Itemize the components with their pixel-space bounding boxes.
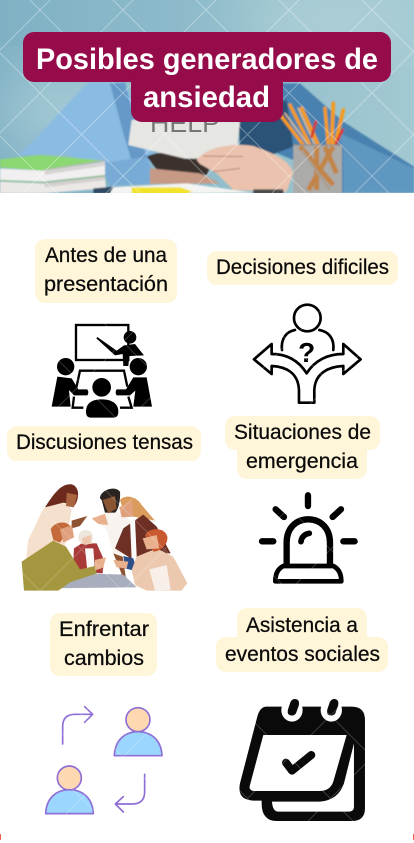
icon: alarm beacon — [262, 495, 355, 581]
label: Enfrentar cambios: cambios — [64, 647, 144, 670]
label: Decisiones dificiles: Decisiones dificiles — [216, 256, 389, 279]
label: Asistencia a eventos sociales: Asistencia a — [246, 614, 358, 637]
label: Situaciones de emergencia: emergencia — [246, 450, 358, 473]
label: Situaciones de emergencia — [225, 416, 380, 479]
icon: arguing group — [22, 484, 187, 591]
label: Asistencia a eventos sociales: eventos sociales — [225, 643, 380, 666]
icon: decision crossroads — [254, 305, 361, 403]
label: Antes de una presentación: presentación — [44, 273, 168, 296]
header photo: stressed student at desk — [0, 0, 414, 194]
watermark lattice over icons — [0, 193, 414, 843]
label: Antes de una presentación — [35, 239, 177, 303]
title — [23, 32, 391, 122]
label: Antes de una presentación: Antes de una — [45, 244, 167, 267]
label: Asistencia a eventos sociales — [216, 608, 388, 672]
note text on paper: HELP — [150, 108, 220, 138]
corner marks — [0, 834, 414, 840]
icon: decision crossroads: ? — [298, 337, 315, 368]
label: Discusiones tensas — [7, 426, 201, 461]
label: Decisiones dificiles — [207, 251, 398, 285]
icon: presentation meeting — [52, 325, 152, 418]
label: Enfrentar cambios — [50, 613, 157, 676]
label: Enfrentar cambios: Enfrentar — [59, 618, 149, 641]
label: Situaciones de emergencia: Situaciones de — [234, 421, 371, 444]
title: ansiedad — [143, 81, 270, 114]
icon: people swapping — [46, 707, 162, 814]
label: Discusiones tensas: Discusiones tensas — [16, 431, 193, 454]
title: Posibles generadores de — [36, 43, 378, 76]
icon: calendar with check — [239, 698, 365, 821]
